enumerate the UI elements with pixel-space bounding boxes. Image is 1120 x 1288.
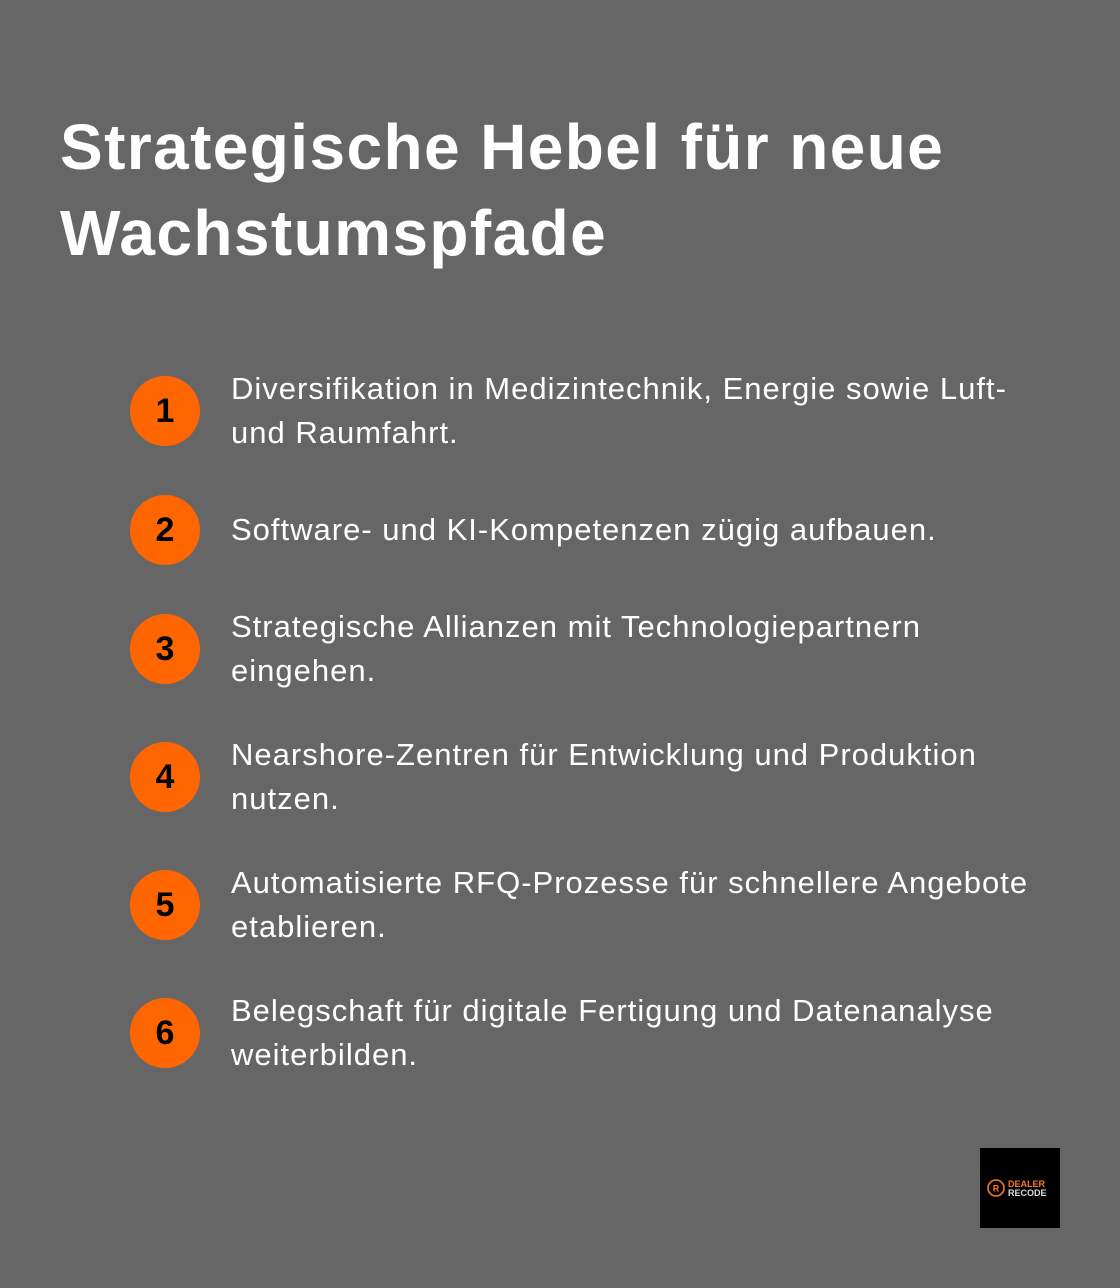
logo: R — [993, 1184, 1000, 1194]
item 4 — [130, 737, 977, 816]
item 5 — [130, 865, 1028, 944]
item 6: Belegschaft für digitale Fertigung und Datenanalyse — [231, 993, 994, 1028]
title: Wachstumspfade — [60, 197, 607, 269]
item 3 — [130, 609, 921, 688]
logo: RECODE — [1008, 1188, 1047, 1198]
item 4: Nearshore-Zentren für Entwicklung und Produktion — [231, 737, 977, 772]
item 5: Automatisierte RFQ-Prozesse für schnellere Angebote — [231, 865, 1028, 900]
title — [60, 111, 944, 269]
item 2: Software- und KI-Kompetenzen zügig aufbauen. — [231, 512, 937, 547]
item 1: und Raumfahrt. — [231, 415, 459, 450]
logo: DEALER — [1008, 1179, 1046, 1189]
item 5: etablieren. — [231, 909, 387, 944]
logo — [980, 1148, 1060, 1228]
title: Strategische Hebel für neue — [60, 111, 944, 183]
item 2 — [130, 495, 937, 565]
item 1: Diversifikation in Medizintechnik, Energie sowie Luft- — [231, 371, 1007, 406]
item 3: eingehen. — [231, 653, 376, 688]
item 4: nutzen. — [231, 781, 340, 816]
item 6 — [130, 993, 994, 1072]
item 6: 6 — [156, 1014, 174, 1052]
item 1 — [130, 371, 1007, 450]
item 4: 4 — [156, 758, 174, 796]
item 3: 3 — [156, 630, 174, 668]
item 1: 1 — [156, 392, 174, 430]
item 2: 2 — [156, 511, 174, 549]
item 5: 5 — [156, 886, 174, 924]
item 3: Strategische Allianzen mit Technologiepartnern — [231, 609, 921, 644]
item 6: weiterbilden. — [231, 1037, 418, 1072]
